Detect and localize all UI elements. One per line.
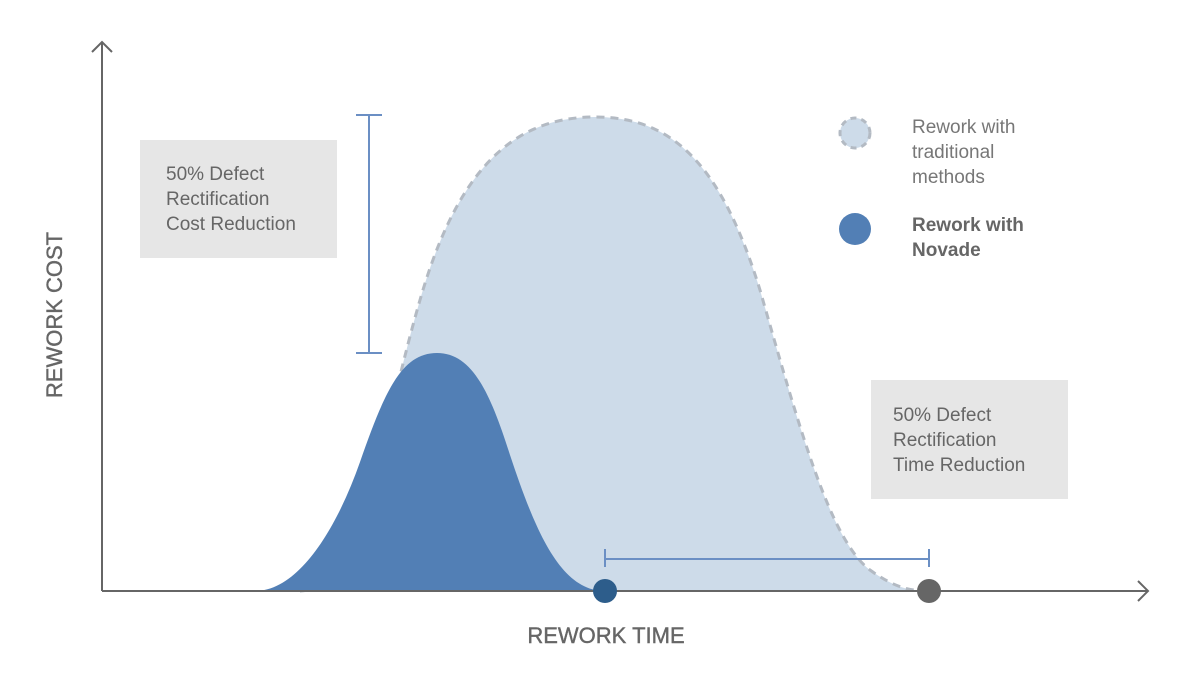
legend: Novade: Novade — [912, 240, 981, 261]
callout: cost reduction: Rectification — [166, 189, 270, 210]
callout: time reduction: Time Reduction — [893, 455, 1025, 476]
callout: cost reduction: Cost Reduction — [166, 214, 296, 235]
point: Novade end — [593, 579, 617, 603]
callout: time reduction: 50% Defect — [893, 405, 992, 426]
curve: Novade rework — [255, 353, 605, 591]
curve: traditional rework — [300, 117, 930, 591]
legend — [839, 117, 1024, 261]
y-axis label: REWORK COST — [42, 232, 67, 398]
legend: Novade — [839, 213, 1024, 261]
cost bracket — [356, 115, 382, 353]
legend: traditional: traditional — [912, 142, 994, 163]
legend: traditional — [840, 117, 1015, 188]
legend: Novade: Rework with — [912, 215, 1024, 236]
axes — [92, 42, 1148, 601]
legend: traditional: Rework with — [912, 117, 1015, 138]
legend: traditional: methods — [912, 167, 985, 188]
point: traditional end — [917, 579, 941, 603]
callout: cost reduction: 50% Defect — [166, 164, 265, 185]
time bracket — [605, 549, 929, 567]
callout: time reduction — [871, 380, 1068, 499]
callout: time reduction: Rectification — [893, 430, 996, 451]
callout: cost reduction — [140, 140, 337, 258]
x-axis label: REWORK TIME — [527, 623, 685, 648]
